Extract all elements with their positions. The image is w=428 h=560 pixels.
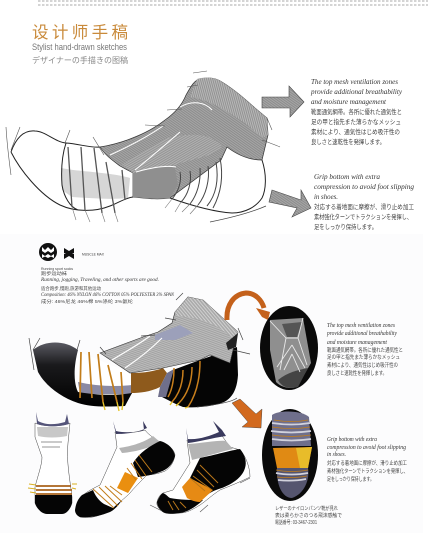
- heel-side panel hatching: [133, 167, 178, 199]
- midfoot shadow: [78, 382, 132, 394]
- note: top mesh, colour: 素材により、通気性はじめ吸汗性の: [327, 361, 398, 369]
- note: grip bottom, sketch: 対応する着地面に摩擦が、滑り止め加工: [314, 202, 414, 211]
- note: top mesh, sketch: [310, 77, 403, 146]
- grey mesh upper: [100, 297, 238, 373]
- note: grip bottom, colour: 足をしっかり保持します。: [327, 475, 374, 483]
- sole yellow edge: [296, 447, 312, 468]
- sketch tails: [6, 71, 280, 175]
- instep hatching: [122, 135, 222, 173]
- note: top mesh, sketch: 素材により、通気性はじめ吸汗性の: [311, 127, 400, 136]
- background panel: [0, 234, 423, 533]
- note: top mesh, sketch: 靴面通気網帯。各所に優れた通気性と: [311, 107, 402, 116]
- heading: 设计师手稿: [32, 23, 128, 42]
- note: top mesh, sketch: 良しさと速乾性を発揮します。: [311, 137, 385, 146]
- pencil tails: [150, 478, 250, 512]
- grey collar: [188, 441, 233, 460]
- sketch white highlight lines: [110, 103, 212, 172]
- orange-brown patch: [131, 368, 167, 393]
- pencil tails: [29, 293, 250, 407]
- brand logos: [39, 243, 105, 261]
- oval: grip sole detail: [262, 409, 318, 501]
- note: top mesh, colour: 靴面通気網帯。各所に優れた通気性と: [327, 346, 403, 354]
- note: top mesh, colour: 足の甲と指先また薄らかなメッシュ: [327, 353, 400, 361]
- black toe: [35, 495, 72, 514]
- heel vertical stripes: [172, 158, 222, 208]
- mesh dark bands: [282, 322, 302, 337]
- sock view: rear: [28, 412, 77, 514]
- note: grip bottom, colour: Grip bottom with extra: [327, 436, 377, 443]
- cuff tops: [36, 412, 69, 426]
- note: contact caption: 電話番号: 03-3467-2301: [275, 519, 317, 526]
- sole black band: [33, 342, 132, 407]
- toe band shading: [61, 168, 130, 199]
- toe outline: [11, 131, 133, 210]
- note: grip bottom, colour: 対応する着地面に摩擦が、滑り止め加工: [327, 459, 407, 467]
- instep blue mesh: [155, 325, 193, 340]
- black toe: [157, 493, 203, 514]
- note: grip bottom, colour: compression to avoid foot slipping: [327, 444, 407, 451]
- cuff band: [175, 297, 238, 343]
- cuff dark accent: [226, 333, 238, 350]
- note: grip bottom, colour: in shoes.: [327, 451, 346, 458]
- grey collar: [119, 436, 160, 453]
- mesh panel: [270, 318, 311, 388]
- black heel: [133, 441, 175, 477]
- black heel: [190, 449, 246, 497]
- orange heel stripes: [168, 361, 200, 407]
- note: top mesh, colour: and moisture management: [327, 339, 387, 346]
- orange patch: [182, 478, 213, 502]
- product specification: 跑步运动袜: [41, 270, 68, 277]
- heel tail: [210, 206, 266, 222]
- black toe: [75, 490, 122, 517]
- top dashed border: [38, 1, 428, 5]
- mesh white lines: [270, 318, 307, 372]
- product specification: Composition: 46% NYLON 46% COTTON 05% POLYESTER 3% SPAN: [41, 293, 175, 298]
- note: top mesh, colour: The top mesh ventilation zones: [327, 322, 395, 329]
- note: top mesh, sketch: provide additional breathability: [310, 87, 403, 96]
- arrow: upper sketch: [262, 86, 304, 117]
- note: top mesh, colour: provide additional breathability: [326, 330, 397, 337]
- note: grip bottom, sketch: 足をしっかり保持します。: [314, 222, 377, 231]
- subtitle english: Stylist hand-drawn sketches: [32, 42, 127, 53]
- note: contact caption: レザーのナイロンパンツ靴が見れ: [275, 505, 338, 512]
- note: grip bottom, sketch: Grip bottom with extra: [314, 172, 380, 181]
- orange toe stripes: [80, 352, 123, 402]
- heel purple fade: [158, 369, 174, 397]
- orange patch: [117, 472, 138, 493]
- note: grip bottom, sketch: [314, 172, 414, 231]
- cuff band: [186, 421, 226, 443]
- title block: [32, 23, 128, 65]
- note: grip bottom, sketch: in shoes.: [314, 192, 338, 201]
- white highlight lines: [112, 336, 162, 368]
- stripes: [168, 465, 218, 510]
- note: grip bottom, colour: [327, 436, 408, 483]
- heel: [170, 160, 265, 213]
- brand name: MUSCLE MAX: [82, 252, 105, 256]
- toe vertical stripes: [68, 147, 125, 213]
- note: contact caption: 表は柔らかさのつる飛沫感触で: [275, 512, 342, 519]
- cuff hatching: [190, 78, 268, 137]
- sole purple areas: [272, 411, 311, 446]
- arrow: lower sketch: [269, 190, 311, 217]
- note: top mesh, colour: [326, 322, 403, 377]
- straight orange arrow to grip: [232, 399, 262, 428]
- sock view: side right: [150, 421, 250, 514]
- coloured sock: main illustration: [29, 293, 250, 411]
- note: top mesh, sketch: The top mesh ventilation zones: [311, 77, 398, 86]
- product specification: 适合跑步,慢跑,旅游和其他运动: [41, 285, 101, 292]
- product specification: [40, 266, 175, 305]
- orange stripes: [36, 486, 72, 494]
- logo square: [64, 248, 74, 259]
- yellow stripe ends: [103, 402, 188, 411]
- note: top mesh, sketch: and moisture management: [311, 97, 387, 106]
- logo round: [39, 243, 57, 261]
- toe hairlines: [72, 199, 198, 222]
- sole orange panel: [273, 447, 312, 468]
- oval: top mesh detail: [260, 306, 318, 390]
- subtitle japanese: デザイナーの手描きの图稿: [32, 55, 128, 65]
- note: grip bottom, sketch: compression to avoid foot slipping: [314, 182, 414, 191]
- heel black: [162, 347, 238, 407]
- note: top mesh, sketch: 足の甲と指先また薄らかなメッシュ: [311, 117, 401, 126]
- note: contact caption: [275, 505, 342, 526]
- cuff band: [113, 421, 147, 434]
- mid foot hatching: [100, 78, 268, 199]
- note: top mesh, colour: 良しさと速乾性を発揮します。: [327, 369, 387, 377]
- sole stripes: [271, 423, 311, 481]
- product specification: Running, jogging, Traveling, and other sports are good.: [40, 277, 159, 283]
- white midfoot: [75, 350, 132, 404]
- stripes: [93, 455, 152, 508]
- product specification: 成分: 46%尼龙 46%棉 5%涤纶 3%氨纶: [41, 298, 134, 305]
- sock view: side left: [75, 421, 175, 518]
- cuff grey bands: [37, 427, 68, 438]
- sketch sock: pencil drawing: [6, 71, 280, 222]
- product specification: Running sport socks: [41, 266, 73, 271]
- curved orange arrow to sole: [227, 293, 270, 320]
